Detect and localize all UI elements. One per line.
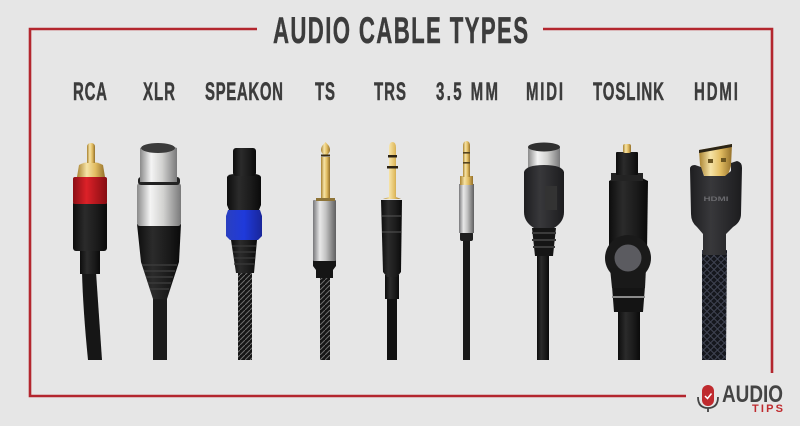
logo: Audio Tips: [698, 381, 783, 415]
label: MIDI: MIDI: [526, 78, 563, 106]
title: AUDIO CABLE TYPES: [273, 10, 528, 51]
label: TS: TS: [315, 78, 335, 106]
label: HDMI: HDMI: [694, 78, 738, 106]
cable: HDMI: HDMI: [704, 197, 729, 203]
cable: MIDI: [524, 142, 564, 360]
logo wordmark: AUDIO: AUDIO: [722, 381, 783, 408]
label: XLR: XLR: [143, 78, 175, 106]
label: RCA: RCA: [73, 78, 107, 106]
icon: microphone: [698, 385, 718, 412]
label: 3.5 MM: 3.5 MM: [436, 78, 498, 106]
logo wordmark: TIPS: TIPS: [752, 403, 783, 415]
cable: 3.5 mm: [459, 141, 474, 360]
label: TRS: TRS: [374, 78, 406, 106]
label: TOSLINK: TOSLINK: [593, 78, 664, 106]
label: SPEAKON: SPEAKON: [205, 78, 283, 106]
cable: TRS: [381, 142, 402, 360]
cable: HDMI: [690, 144, 742, 360]
cable: Speakon: [226, 148, 262, 360]
cable: TS: [313, 142, 336, 360]
cable: Toslink: [605, 144, 651, 360]
cable: XLR: [137, 143, 181, 360]
red frame: [30, 29, 772, 396]
cable: RCA: [73, 143, 107, 360]
